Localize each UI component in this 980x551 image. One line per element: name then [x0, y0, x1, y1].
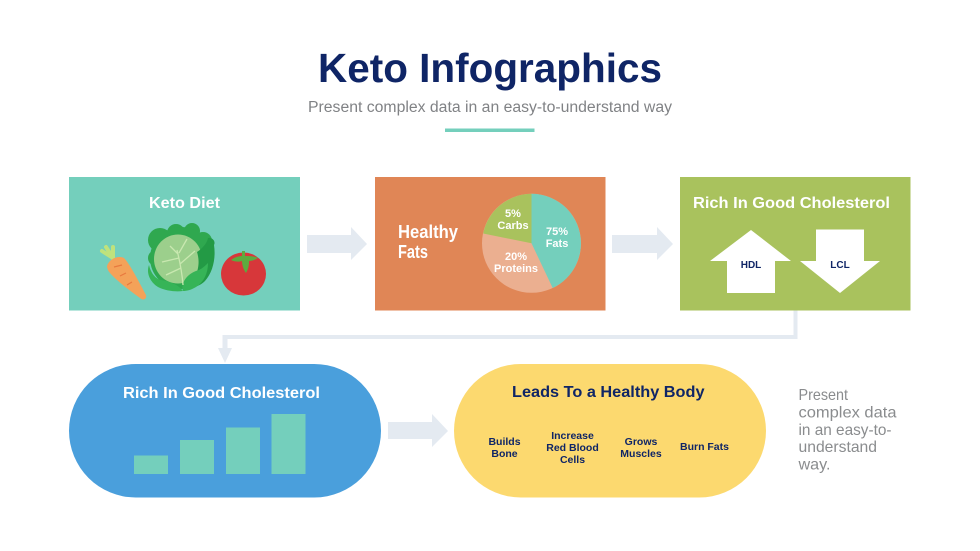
icon: carrot	[102, 247, 146, 299]
item: builds bone: Builds	[488, 436, 521, 448]
heading: healthy fats	[398, 222, 458, 262]
pie label: fats: Fats	[546, 238, 568, 250]
arrow: blue pill to yellow pill	[388, 414, 448, 447]
pie label: carbs	[497, 208, 529, 232]
title underline accent	[445, 128, 534, 132]
heading: blue pill: Rich In Good Cholesterol	[123, 385, 320, 402]
arrow: keto diet to healthy fats	[307, 227, 367, 260]
item: increase red blood cells	[546, 430, 599, 466]
side text block: way.	[797, 456, 830, 474]
side text block: understand	[798, 439, 877, 456]
title: Keto Infographics	[318, 45, 662, 91]
panel: rich in good cholesterol (green)	[680, 177, 910, 310]
heading: cholesterol: Rich In Good Cholesterol	[693, 195, 890, 212]
icon: tomato	[221, 251, 266, 296]
panel: rich in good cholesterol (blue pill)	[69, 364, 381, 498]
pie label: carbs: Carbs	[497, 220, 529, 232]
pie label: proteins	[494, 251, 538, 275]
item: grows muscles	[620, 436, 662, 460]
heading: yellow pill: Leads To a Healthy Body	[512, 384, 705, 401]
item: builds bone	[488, 436, 521, 460]
pie label: proteins: Proteins	[494, 263, 538, 275]
icon: LCL down arrow	[800, 230, 880, 293]
panel: leads to a healthy body (yellow pill)	[454, 364, 766, 498]
side text block	[797, 387, 897, 474]
connector arrow: green panel to blue pill	[218, 310, 798, 363]
item: increase red blood cells: Increase	[551, 430, 594, 442]
pie chart	[482, 194, 581, 293]
pie label: carbs: 5%	[505, 208, 521, 220]
item: builds bone: Bone	[491, 448, 518, 460]
heading: keto diet: Keto Diet	[149, 195, 221, 212]
panel: keto diet	[69, 177, 300, 310]
item: grows muscles: Muscles	[620, 448, 662, 460]
pie label: fats	[546, 226, 568, 250]
heading: healthy fats: Healthy	[398, 222, 458, 242]
side text block: in an easy-to-	[798, 422, 892, 439]
bar chart	[134, 414, 306, 474]
panel: healthy fats	[375, 177, 606, 310]
side text block: Present	[798, 387, 848, 404]
subtitle: Present complex data in an easy-to-understand way	[308, 99, 672, 116]
item: grows muscles: Grows	[625, 436, 657, 448]
item: burn fats: Burn Fats	[680, 441, 729, 453]
icon: HDL up arrow: HDL	[741, 260, 761, 271]
pie label: fats: 75%	[546, 226, 568, 238]
icon: cabbage	[148, 223, 215, 291]
arrow: healthy fats to cholesterol	[612, 227, 673, 260]
side text block: complex data	[798, 404, 897, 422]
heading: healthy fats: Fats	[398, 242, 428, 262]
icon: HDL up arrow	[710, 230, 791, 293]
pie label: proteins: 20%	[505, 251, 527, 263]
item: increase red blood cells: Red Blood	[546, 442, 599, 454]
item: increase red blood cells: Cells	[560, 454, 585, 466]
icon: LCL down arrow: LCL	[830, 260, 850, 271]
